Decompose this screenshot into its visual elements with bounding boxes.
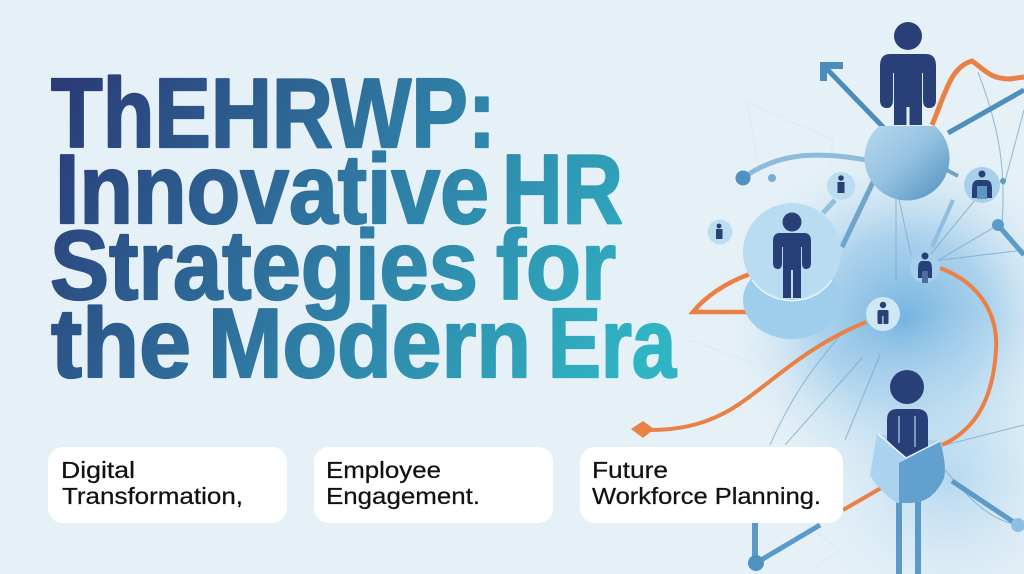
bowl xyxy=(870,434,945,503)
person node centre xyxy=(910,252,940,283)
card: future workforce planning: Future xyxy=(592,457,668,483)
title: for xyxy=(496,210,616,320)
title: the xyxy=(51,288,191,398)
card: future workforce planning xyxy=(580,447,843,523)
faint background lines xyxy=(690,102,840,570)
thin network lines xyxy=(770,72,1024,525)
top sphere with person xyxy=(865,22,950,200)
title: ThEHRWP: xyxy=(51,58,496,168)
title: Era xyxy=(548,288,677,398)
card: employee engagement: Employee xyxy=(326,457,441,483)
card: digital transformation xyxy=(48,447,287,523)
title xyxy=(50,58,677,398)
title: Modern xyxy=(208,288,531,398)
icon: arrow up-left xyxy=(820,62,884,128)
person node right xyxy=(964,167,1000,203)
title: Innovative xyxy=(55,134,489,244)
orange curves xyxy=(650,61,1024,510)
blue connector lines xyxy=(743,90,1024,563)
bottom person with bowl xyxy=(870,370,945,574)
card: future workforce planning: Workforce Planning. xyxy=(592,483,821,509)
icon: person bottom xyxy=(887,370,928,458)
network diagram xyxy=(631,22,1024,574)
middle circle with person xyxy=(743,203,841,339)
icon: person top xyxy=(880,22,936,125)
person node lower xyxy=(866,297,900,331)
card: employee engagement: Engagement. xyxy=(326,483,480,509)
legs xyxy=(896,500,921,574)
icon: orange diamond xyxy=(631,421,654,438)
icon: person middle xyxy=(773,212,811,298)
small person node left xyxy=(708,220,732,244)
card: employee engagement xyxy=(314,447,553,523)
card: digital transformation: Transformation, xyxy=(62,483,243,509)
background glow xyxy=(680,120,1024,574)
card: digital transformation: Digital xyxy=(61,457,135,483)
nodes xyxy=(736,170,1024,571)
small person node xyxy=(827,172,855,200)
title: Strategies xyxy=(50,210,478,320)
title: HR xyxy=(502,134,623,244)
